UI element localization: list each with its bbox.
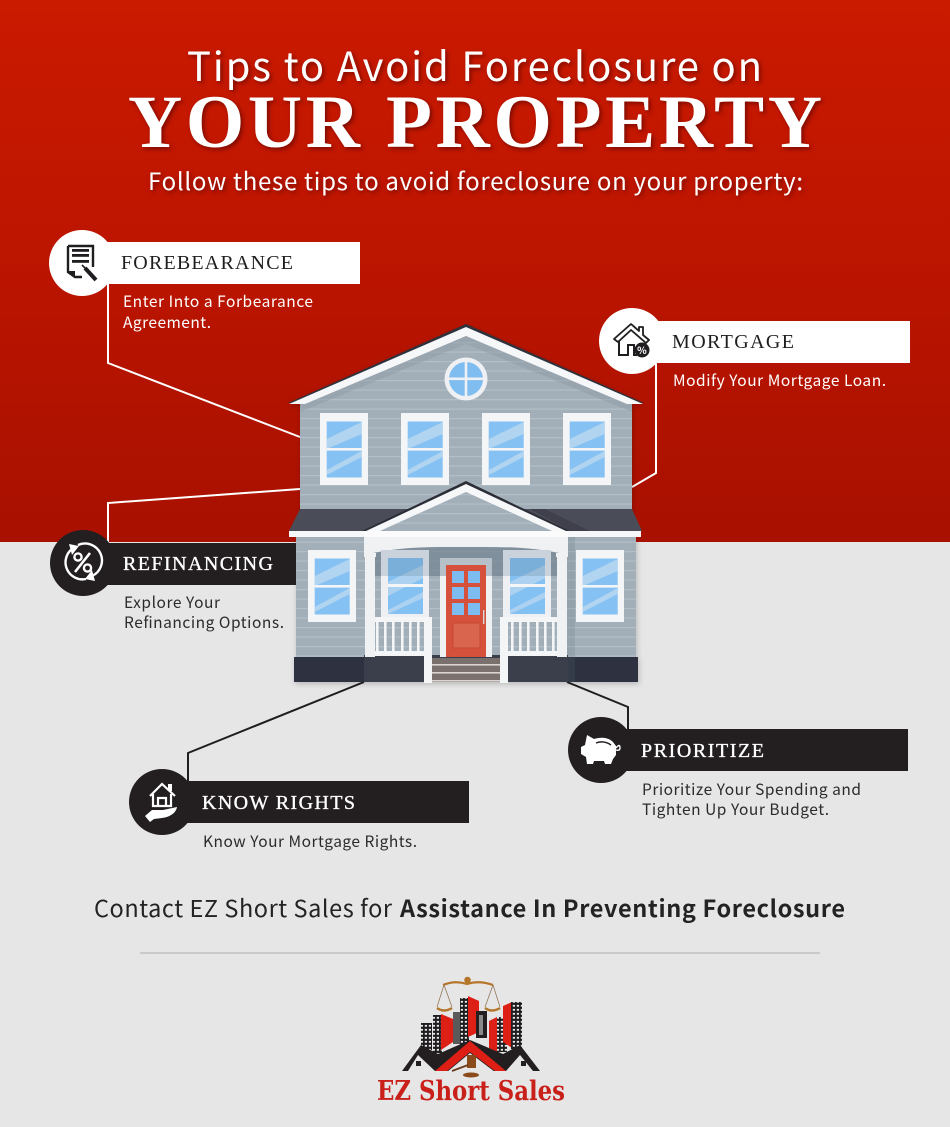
label bar: [162, 781, 469, 823]
callout: forebearance: [49, 230, 360, 333]
description: [123, 290, 313, 333]
description: [124, 591, 284, 633]
callout: know rights: [129, 769, 469, 852]
description: [642, 778, 861, 820]
logo skyline: [421, 996, 522, 1053]
description: Tighten Up Your Budget.: [642, 798, 829, 820]
lower storey: [294, 537, 638, 682]
icon: house with percent: %: [637, 342, 647, 357]
description: Explore Your: [124, 591, 221, 613]
callout: prioritize: [568, 717, 908, 820]
porch windows: [381, 550, 551, 618]
porch: [364, 531, 575, 682]
side windows: [308, 550, 624, 622]
label bar: [632, 321, 910, 363]
round attic window: [444, 358, 488, 400]
front door: [440, 558, 492, 657]
icon: percent with arrows: [50, 530, 116, 596]
icon: piggy bank: [568, 717, 634, 783]
heading: REFINANCING: [123, 553, 273, 575]
description: Prioritize Your Spending and: [642, 778, 861, 800]
icon: document with pen: [49, 230, 115, 296]
title line one: Tips to Avoid Foreclosure on: [187, 35, 762, 93]
label bar: [601, 729, 908, 771]
label bar: [83, 543, 296, 585]
logo roofline: [402, 1040, 540, 1072]
call to action: Contact EZ Short Sales for: [94, 890, 393, 924]
logo: EZ Short Sales: [377, 977, 565, 1107]
connector lines: [108, 284, 656, 781]
title line two: YOUR PROPERTY: [128, 81, 822, 164]
logo wordmark: EZ Short Sales: [377, 1076, 565, 1107]
porch columns: [364, 553, 568, 657]
callout: refinancing: [50, 530, 296, 633]
heading: KNOW RIGHTS: [202, 792, 355, 814]
upper windows: [320, 413, 611, 485]
main roof: [288, 324, 644, 403]
title: [128, 35, 822, 197]
description: Agreement.: [123, 311, 211, 333]
call to action: [94, 890, 845, 924]
heading: PRIORITIZE: [641, 740, 764, 762]
porch roof: [289, 481, 642, 537]
porch railings: [373, 617, 559, 683]
icon: house in hand: [129, 769, 195, 835]
house illustration: [288, 324, 644, 683]
logo gavel: [452, 1055, 479, 1078]
subtitle: Follow these tips to avoid foreclosure on your property:: [148, 162, 803, 197]
upper storey: [288, 324, 644, 513]
icon: house with percent: [599, 308, 665, 374]
description: Know Your Mortgage Rights.: [203, 830, 417, 852]
description: Enter Into a Forbearance: [123, 290, 313, 312]
logo scales: [437, 977, 500, 1010]
front steps: [432, 658, 500, 682]
description: Modify Your Mortgage Loan.: [673, 369, 886, 391]
heading: FOREBEARANCE: [121, 252, 293, 274]
label bar: [82, 242, 360, 284]
call to action: Assistance In Preventing Foreclosure: [399, 890, 845, 924]
callout: mortgage: [599, 308, 910, 391]
description: Refinancing Options.: [124, 611, 284, 633]
heading: MORTGAGE: [672, 331, 794, 353]
